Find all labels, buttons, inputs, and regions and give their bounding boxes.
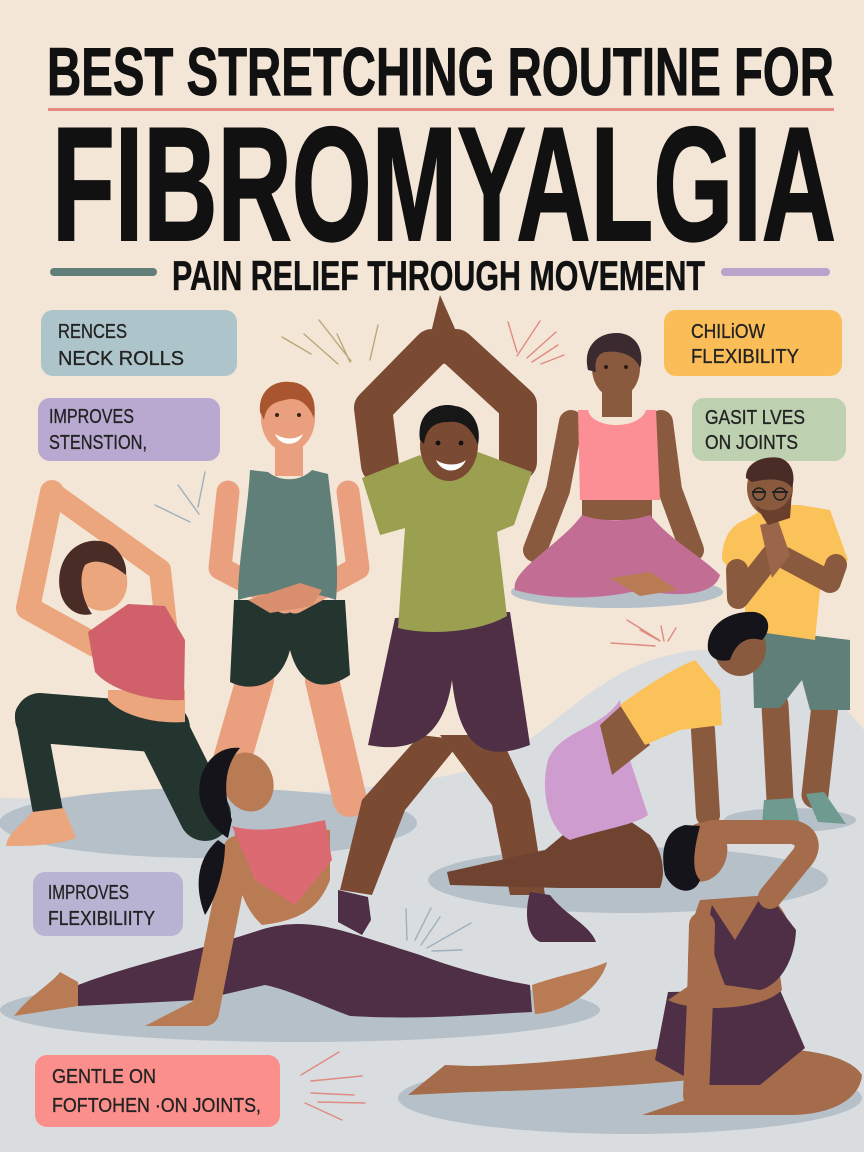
callout: improves stenstion: STENSTION,: [49, 432, 147, 454]
callout: flexibility orange: FLEXIBILITY: [691, 346, 799, 368]
floor shadows: [0, 576, 862, 1134]
callout: flexibility orange: [664, 310, 842, 376]
callout: improves flexibility: FLEXIBILIITY: [48, 908, 155, 930]
callout: on joints: GASIT LVES: [705, 407, 805, 429]
callout: neck rolls: NECK ROLLS: [58, 348, 184, 370]
figure: man with glasses: [722, 457, 850, 824]
callout: on joints: [692, 398, 846, 461]
callout: gentle on joints: [35, 1055, 280, 1127]
figure: man in teal tank: [220, 382, 358, 800]
figure: woman on all fours: [447, 612, 768, 888]
callout: gentle on joints: FOFTOHEN ·ON JOINTS,: [52, 1095, 261, 1117]
figure: woman seated cross-legged: [515, 333, 720, 598]
figure: woman reclining twist: [408, 817, 862, 1115]
callout: improves stenstion: IMPROVES: [49, 406, 134, 428]
callout: improves stenstion: [38, 398, 220, 461]
callout: flexibility orange: CHILiOW: [691, 321, 765, 343]
callout: improves flexibility: [33, 872, 183, 936]
callout: gentle on joints: GENTLE ON: [52, 1066, 156, 1088]
figure: central man arms raised: [338, 295, 596, 942]
callout: neck rolls: RENCES: [58, 321, 127, 343]
motion ticks: [155, 320, 676, 1120]
figure: woman seated splits: [14, 745, 607, 1026]
callout: neck rolls: [41, 310, 237, 376]
figure: woman side bend lunge: [6, 492, 205, 846]
callout: improves flexibility: IMPROVES: [48, 882, 129, 904]
callout: on joints: ON JOINTS: [705, 432, 798, 454]
